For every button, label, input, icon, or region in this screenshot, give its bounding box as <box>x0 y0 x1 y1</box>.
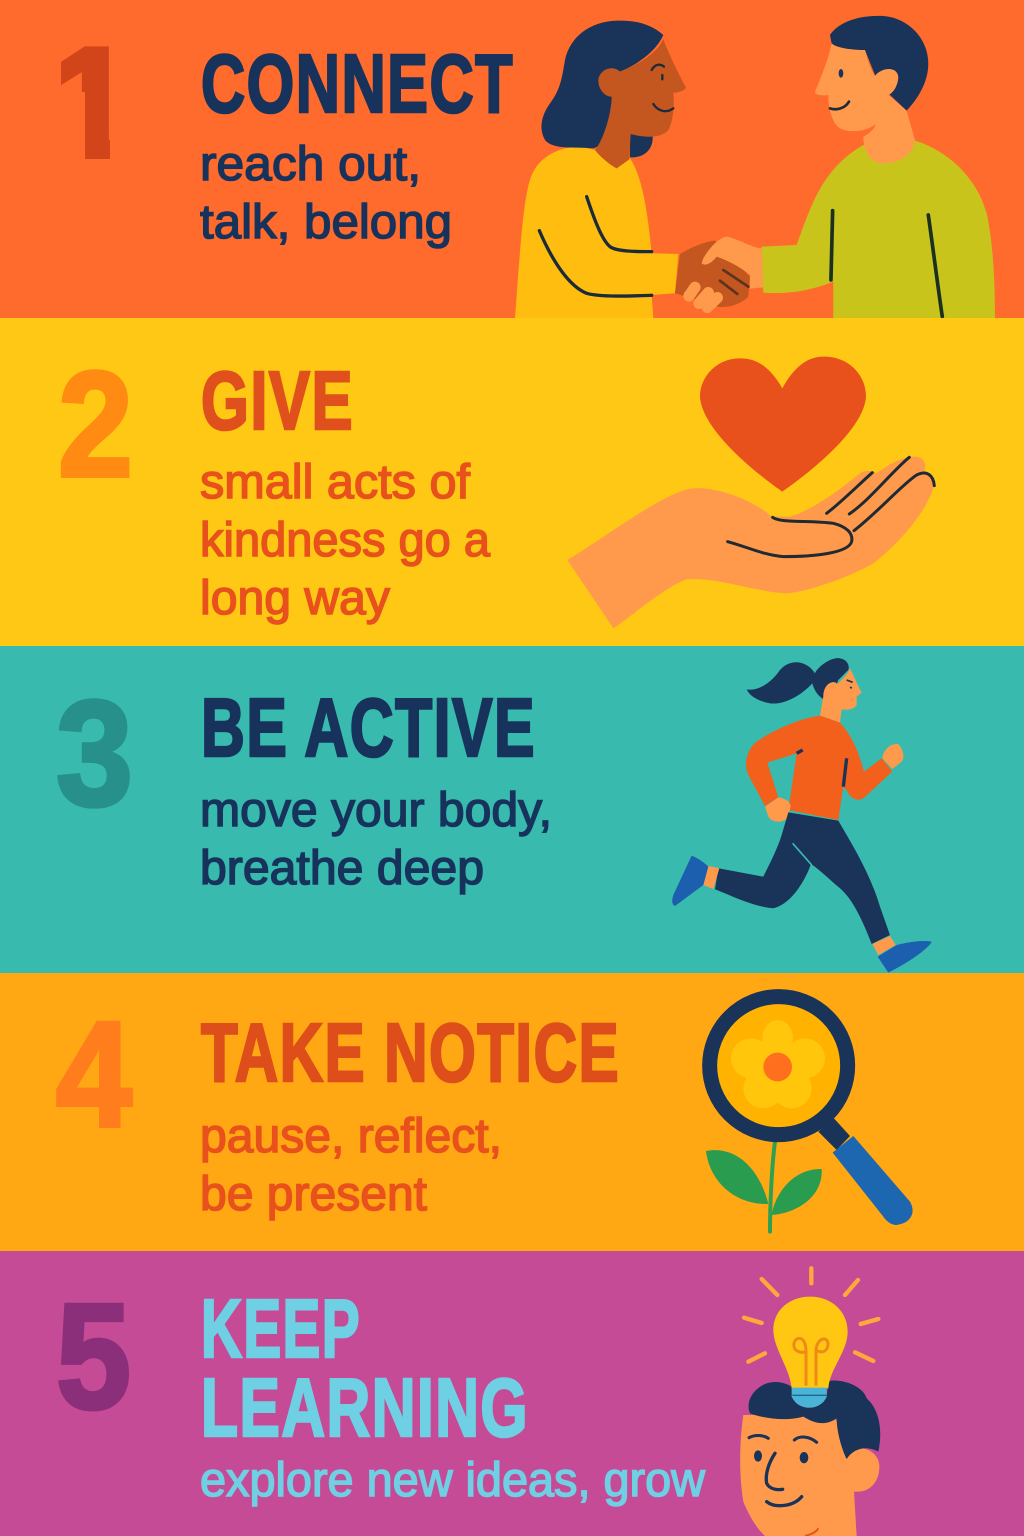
text: give description: kindness go a <box>200 514 490 567</box>
panel: take notice <box>0 973 1024 1251</box>
text: give description: small acts of <box>200 456 471 509</box>
icon: heart above open hand <box>567 357 934 628</box>
heading: connect: CONNECT <box>201 37 514 130</box>
text: take notice description <box>200 1110 502 1221</box>
text: be active description <box>200 784 552 895</box>
icon: head with light bulb <box>740 1268 880 1536</box>
number 4: 4 <box>56 990 132 1158</box>
icon: running woman <box>672 658 932 973</box>
panel: give <box>0 318 1024 646</box>
text: connect description <box>200 138 452 249</box>
panel: be active <box>0 646 1024 973</box>
panel: keep learning <box>0 1251 1024 1536</box>
heading: keep learning: LEARNING <box>201 1361 529 1454</box>
panel: connect <box>61 16 995 318</box>
number 1: 1 <box>47 14 136 193</box>
connect background <box>0 0 1024 318</box>
icon: two people shaking hands <box>515 16 995 318</box>
text: be active description: move your body, <box>200 784 552 837</box>
number 5: 5 <box>56 1272 131 1440</box>
heading: be active: BE ACTIVE <box>201 681 536 774</box>
heading: take notice: TAKE NOTICE <box>201 1006 620 1099</box>
number 2: 2 <box>58 340 133 508</box>
text: connect description: talk, belong <box>200 196 452 249</box>
take notice background <box>0 973 1024 1251</box>
keep learning background <box>0 1251 1024 1536</box>
text: give description: long way <box>200 572 390 625</box>
text: connect description: reach out, <box>200 138 421 191</box>
icon: magnifying glass over flower <box>706 997 913 1232</box>
number 3: 3 <box>56 669 133 837</box>
give background <box>0 318 1024 646</box>
text: give description <box>200 456 490 625</box>
text: keep learning description: explore new ideas, grow <box>200 1454 705 1507</box>
text: take notice description: be present <box>200 1168 427 1221</box>
text: be active description: breathe deep <box>200 842 484 895</box>
text: take notice description: pause, reflect, <box>200 1110 502 1163</box>
heading: give: GIVE <box>201 354 354 447</box>
be active background <box>0 646 1024 973</box>
heading: keep learning <box>201 1282 529 1454</box>
heading: keep learning: KEEP <box>201 1282 361 1375</box>
